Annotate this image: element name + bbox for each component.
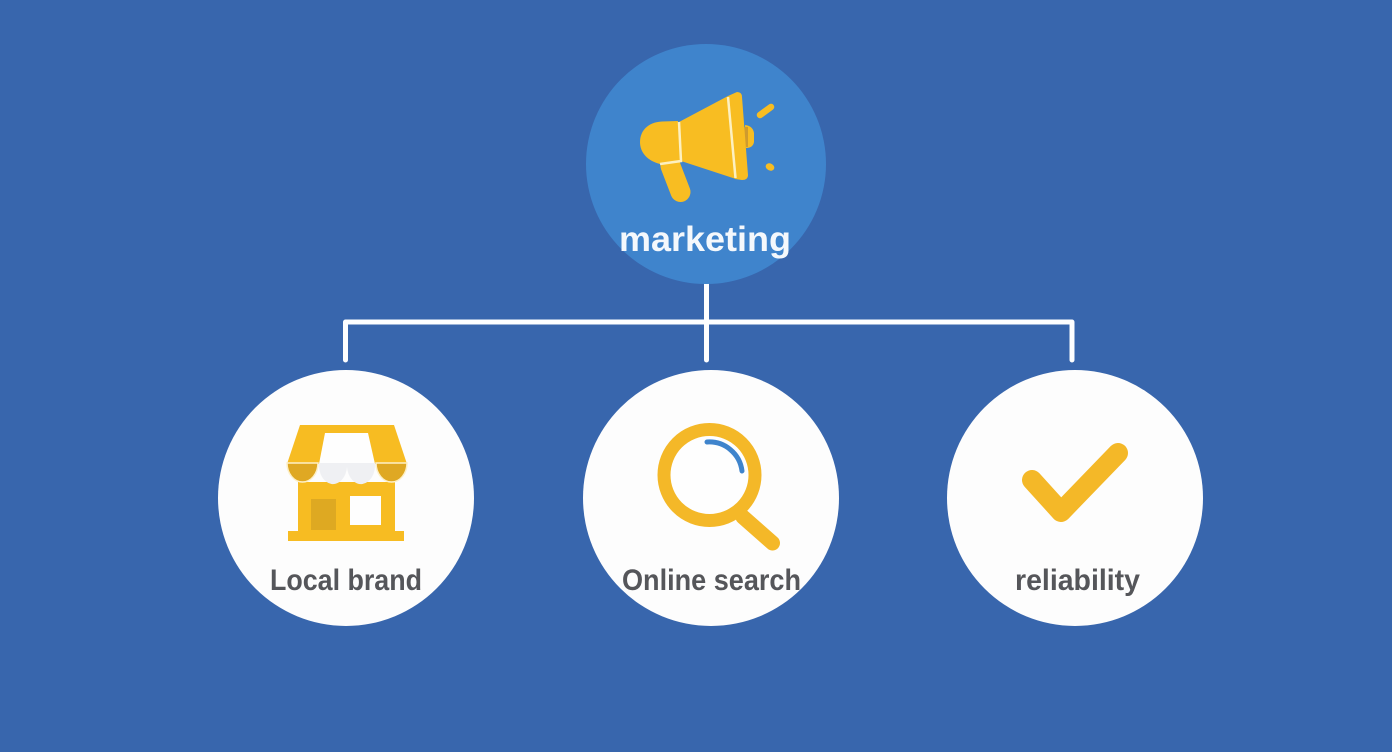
marketing circle bbox=[586, 44, 826, 284]
node: online search bbox=[583, 370, 839, 626]
label: reliability: reliability bbox=[1015, 564, 1141, 597]
reliability circle bbox=[947, 370, 1203, 626]
node: marketing bbox=[586, 44, 826, 284]
icon: check mark bbox=[1032, 453, 1118, 512]
connector tree bbox=[346, 284, 1072, 360]
local brand circle bbox=[218, 370, 474, 626]
label: Online search: Online search bbox=[622, 564, 801, 597]
icon: magnifying glass bbox=[664, 430, 772, 543]
online search circle bbox=[583, 370, 839, 626]
label: Local brand: Local brand bbox=[270, 564, 422, 597]
node: reliability bbox=[947, 370, 1203, 626]
icon: megaphone bbox=[640, 92, 776, 192]
label: marketing: marketing bbox=[619, 219, 791, 259]
icon: storefront bbox=[287, 425, 407, 541]
node: local brand bbox=[218, 370, 474, 626]
